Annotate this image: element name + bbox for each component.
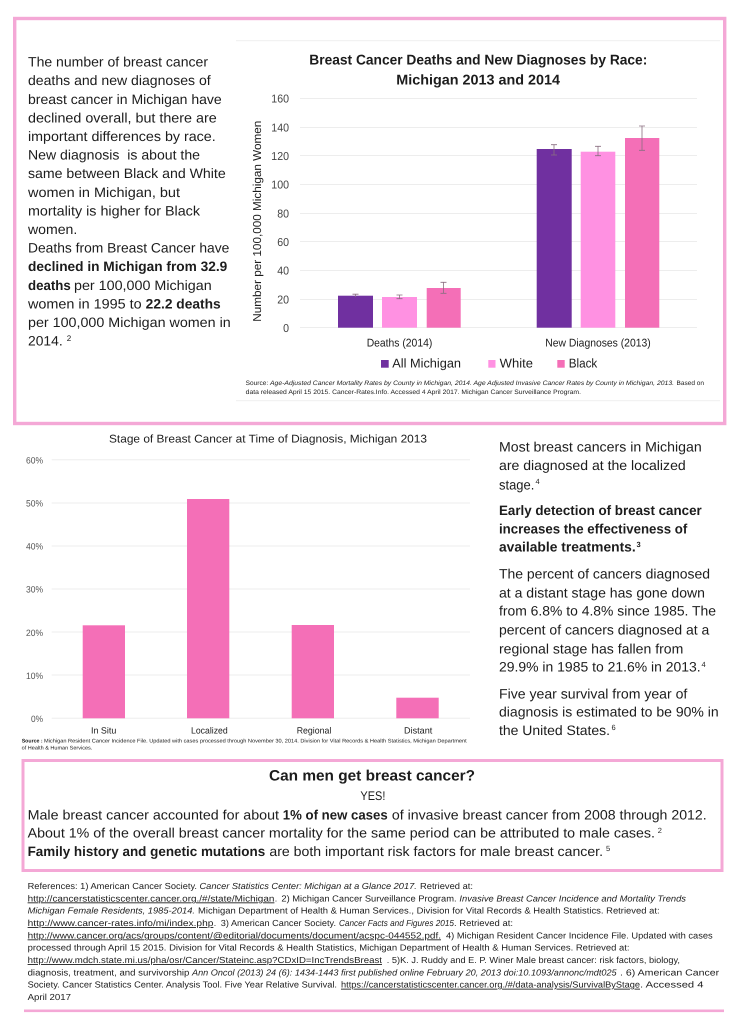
- references: [28, 881, 719, 1002]
- y axis labels: 30%: [26, 585, 43, 595]
- references: Michigan Female Residents, 1985-2014.: [28, 906, 195, 916]
- text block: intro on deaths and diagnoses: women.: [27, 222, 77, 237]
- category labels: Regional: [297, 726, 331, 736]
- chart source: [246, 380, 704, 396]
- text block: male breast cancer facts: are both important risk factors for male breast cancer.: [269, 844, 603, 859]
- chart source: of Health & Human Services.: [22, 746, 92, 752]
- text block: intro on deaths and diagnoses: important differences by race.: [28, 129, 216, 144]
- y axis labels: 20: [277, 294, 289, 306]
- references: http://cancerstatisticscenter.cancer.org./#/state/Michigan: [28, 893, 275, 903]
- references: . 5)K. J. Ruddy and E. P. Winer Male breast cancer: risk factors, biology,: [387, 955, 680, 965]
- text block: early detection: increases the effectiveness of: [499, 521, 688, 536]
- text block: intro on deaths and diagnoses: The number of breast cancer: [28, 54, 208, 70]
- category labels: Deaths (2014): [367, 338, 433, 350]
- y axis title: Number per 100,000 Michigan Women: [252, 121, 264, 322]
- references: https://cancerstatisticscenter.cancer.org./#/data-analysis/SurvivalByStage: [341, 980, 640, 990]
- text block: male breast cancer facts: 1% of new cases: [283, 807, 388, 822]
- chart title: Stage of Breast Cancer at Time of Diagnosis, Michigan 2013: [109, 433, 427, 445]
- references: References: 1) American Cancer Society.: [28, 881, 197, 891]
- text block: male breast cancer facts: About 1% of the overall breast cancer mortality for the same period can be attributed to male cases.: [28, 826, 655, 841]
- text block: intro on deaths and diagnoses: women in 1995 to: [27, 296, 142, 311]
- references: Ann Oncol (2013) 24 (6): 1434-1443 first published online February 20, 2013 doi:10.1093/annonc/mdt025: [191, 967, 617, 977]
- references: diagnosis, treatment, and survivorship: [28, 967, 190, 977]
- chart title: Michigan 2013 and 2014: [396, 72, 560, 88]
- text block: intro on deaths and diagnoses: women in Michigan, but: [27, 185, 180, 200]
- text block: early detection: Most breast cancers in Michigan: [499, 440, 702, 455]
- text block: early detection: regional stage has fallen from: [499, 641, 683, 656]
- text block: intro on deaths and diagnoses: deaths: [28, 278, 71, 293]
- legend: All Michigan: [392, 356, 461, 371]
- text block: early detection: 3: [636, 540, 641, 549]
- references: 2) Michigan Cancer Surveillance Program.: [281, 893, 457, 903]
- y axis labels: [271, 94, 289, 335]
- text block: male breast cancer facts: [28, 807, 707, 859]
- text block: male breast cancer facts: 5: [606, 844, 610, 853]
- references: Invasive Breast Cancer Incidence and Mortality Trends: [459, 893, 687, 903]
- references: . Retrieved at:: [454, 918, 513, 928]
- text block: intro on deaths and diagnoses: same between Black and White: [28, 166, 226, 181]
- references: 4) Michigan Resident Cancer Incidence File. Updated with cases: [446, 930, 713, 940]
- text block: intro on deaths and diagnoses: Deaths from Breast Cancer have: [28, 241, 229, 256]
- text block: early detection: Early detection of breast cancer: [499, 503, 702, 518]
- y axis labels: 40: [277, 266, 289, 278]
- chart source: Source:: [246, 380, 268, 387]
- y axis labels: 10%: [26, 671, 43, 681]
- answer: YES!: [360, 789, 385, 803]
- references: Society. Cancer Statistics Center. Analysis Tool. Five Year Relative Survival.: [28, 980, 337, 990]
- legend: Black: [569, 356, 598, 371]
- references: http://www.cancer.org/acs/groups/content/@editorial/documents/document/acspc-044552.pdf.: [28, 930, 441, 940]
- text block: early detection: available treatments.: [499, 540, 636, 555]
- text block: early detection: 6: [612, 723, 616, 732]
- text block: early detection: 4: [702, 660, 706, 669]
- panel: stage at diagnosis chart: [22, 433, 470, 752]
- references: . 6) American Cancer: [620, 967, 719, 977]
- references: .: [275, 893, 277, 903]
- y axis labels: 60: [277, 237, 289, 249]
- category labels: Localized: [191, 726, 228, 736]
- text block: male breast cancer facts: 2: [658, 826, 662, 835]
- text block: early detection: the United States.: [499, 723, 610, 738]
- text block: male breast cancer facts: Male breast cancer accounted for about: [28, 807, 279, 822]
- y axis labels: 140: [271, 122, 289, 134]
- text block: intro on deaths and diagnoses: 2014.: [28, 334, 63, 349]
- bars: new diagnoses 2013: [537, 138, 659, 328]
- text block: intro on deaths and diagnoses: New diagnosis is about the: [28, 148, 200, 163]
- error bars: [352, 126, 645, 299]
- text block: early detection: percent of cancers diagnosed at a: [499, 622, 710, 637]
- references: http://www.mdch.state.mi.us/pha/osr/Cancer/Stateinc.asp?CDxID=IncTrendsBreast: [28, 955, 383, 965]
- chart source: Source :: [22, 739, 43, 745]
- y axis labels: 0: [283, 323, 289, 335]
- references: http://www.cancer-rates.info/mi/index.php: [28, 918, 214, 928]
- text block: male breast cancer facts: of invasive breast cancer from 2008 through 2012.: [392, 807, 707, 822]
- panel: deaths and diagnoses by race: [15, 18, 725, 424]
- heading: Can men get breast cancer?: [269, 768, 475, 785]
- y axis labels: 100: [271, 180, 289, 192]
- y axis labels: 160: [271, 94, 289, 106]
- category labels: [367, 338, 651, 350]
- text block: intro on deaths and diagnoses: breast cancer in Michigan have: [28, 92, 222, 107]
- category labels: [91, 726, 433, 736]
- text block: male breast cancer facts: Family history and genetic mutations: [28, 844, 265, 859]
- text block: early detection: stage.: [499, 477, 534, 492]
- text block: intro on deaths and diagnoses: per 100,000 Michigan women in: [28, 315, 231, 330]
- chart source: [22, 739, 467, 752]
- category labels: Distant: [404, 726, 433, 736]
- text block: early detection: from 6.8% to 4.8% since 1985. The: [499, 604, 716, 619]
- chart title: Breast Cancer Deaths and New Diagnoses by Race:: [309, 52, 647, 68]
- text block: early detection: diagnosis is estimated to be 90% in: [499, 705, 719, 720]
- text block: intro on deaths and diagnoses: 2: [67, 334, 72, 343]
- chart source: Based on: [676, 380, 704, 387]
- references: processed through April 15 2015. Division for Vital Records & Health Statistics, Michigan Department of Health & Human Services. Retrieved at:: [28, 943, 630, 953]
- text block: early detection: at a distant stage has gone down: [499, 585, 705, 600]
- text block: intro on deaths and diagnoses: declined overall, but there are: [28, 110, 217, 125]
- text block: early detection: 29.9% in 1985 to 21.6% in 2013.: [499, 660, 701, 675]
- legend: White: [500, 356, 533, 371]
- category labels: New Diagnoses (2013): [545, 338, 651, 350]
- y axis labels: [26, 455, 43, 724]
- references: .: [214, 918, 216, 928]
- y axis labels: 0%: [31, 714, 43, 724]
- y axis labels: 120: [271, 151, 289, 163]
- text block: intro on deaths and diagnoses: declined in Michigan from 32.9: [28, 259, 228, 274]
- text block: early detection: [499, 440, 719, 738]
- chart source: Age-Adjusted Cancer Mortality Rates by County in Michigan, 2014. Age Adjusted Invasive Cancer Rates by County in Michigan, 2013.: [269, 380, 674, 387]
- text block: early detection: The percent of cancers diagnosed: [499, 566, 710, 581]
- y axis labels: 50%: [26, 498, 43, 508]
- text block: intro on deaths and diagnoses: mortality is higher for Black: [28, 203, 200, 218]
- chart title: [309, 52, 647, 88]
- chart: deaths and new diagnoses by race: [236, 40, 720, 401]
- text block: intro on deaths and diagnoses: 22.2 deaths: [146, 296, 221, 311]
- bars: stage percentages: [83, 499, 439, 718]
- y axis labels: 40%: [26, 542, 43, 552]
- references: Retrieved at:: [420, 881, 473, 891]
- y axis labels: 80: [277, 208, 289, 220]
- references: Cancer Facts and Figures 2015: [339, 918, 454, 928]
- text block: intro on deaths and diagnoses: [27, 54, 231, 349]
- references: Michigan Department of Health & Human Services., Division for Vital Records & Health Statistics. Retrieved at:: [198, 906, 660, 916]
- text block: early detection: Five year survival from year of: [499, 686, 688, 701]
- text block: early detection: are diagnosed at the localized: [499, 458, 686, 473]
- y axis labels: 60%: [26, 455, 43, 465]
- legend: [381, 356, 598, 371]
- category labels: In Situ: [91, 726, 116, 736]
- references: . Accessed 4: [640, 980, 704, 990]
- references: 3) American Cancer Society.: [221, 918, 336, 928]
- text block: early detection: 4: [536, 477, 540, 486]
- text block: intro on deaths and diagnoses: deaths and new diagnoses of: [28, 73, 211, 88]
- bars: deaths 2014: [338, 288, 461, 328]
- y axis labels: 20%: [26, 628, 43, 638]
- references: April 2017: [28, 992, 71, 1002]
- text block: intro on deaths and diagnoses: per 100,000 Michigan: [74, 278, 212, 293]
- references: Cancer Statistics Center: Michigan at a Glance 2017.: [200, 881, 417, 891]
- chart source: Michigan Resident Cancer Incidence File. Updated with cases processed through November 30, 2014. Division for Vital Records & Health Statistics, Michigan Department: [44, 739, 467, 745]
- panel: can men get breast cancer: [23, 760, 722, 870]
- chart source: data released April 15 2015. Cancer-Rates.Info. Accessed 4 April 2017. Michigan Cancer Surveillance Program.: [246, 389, 581, 396]
